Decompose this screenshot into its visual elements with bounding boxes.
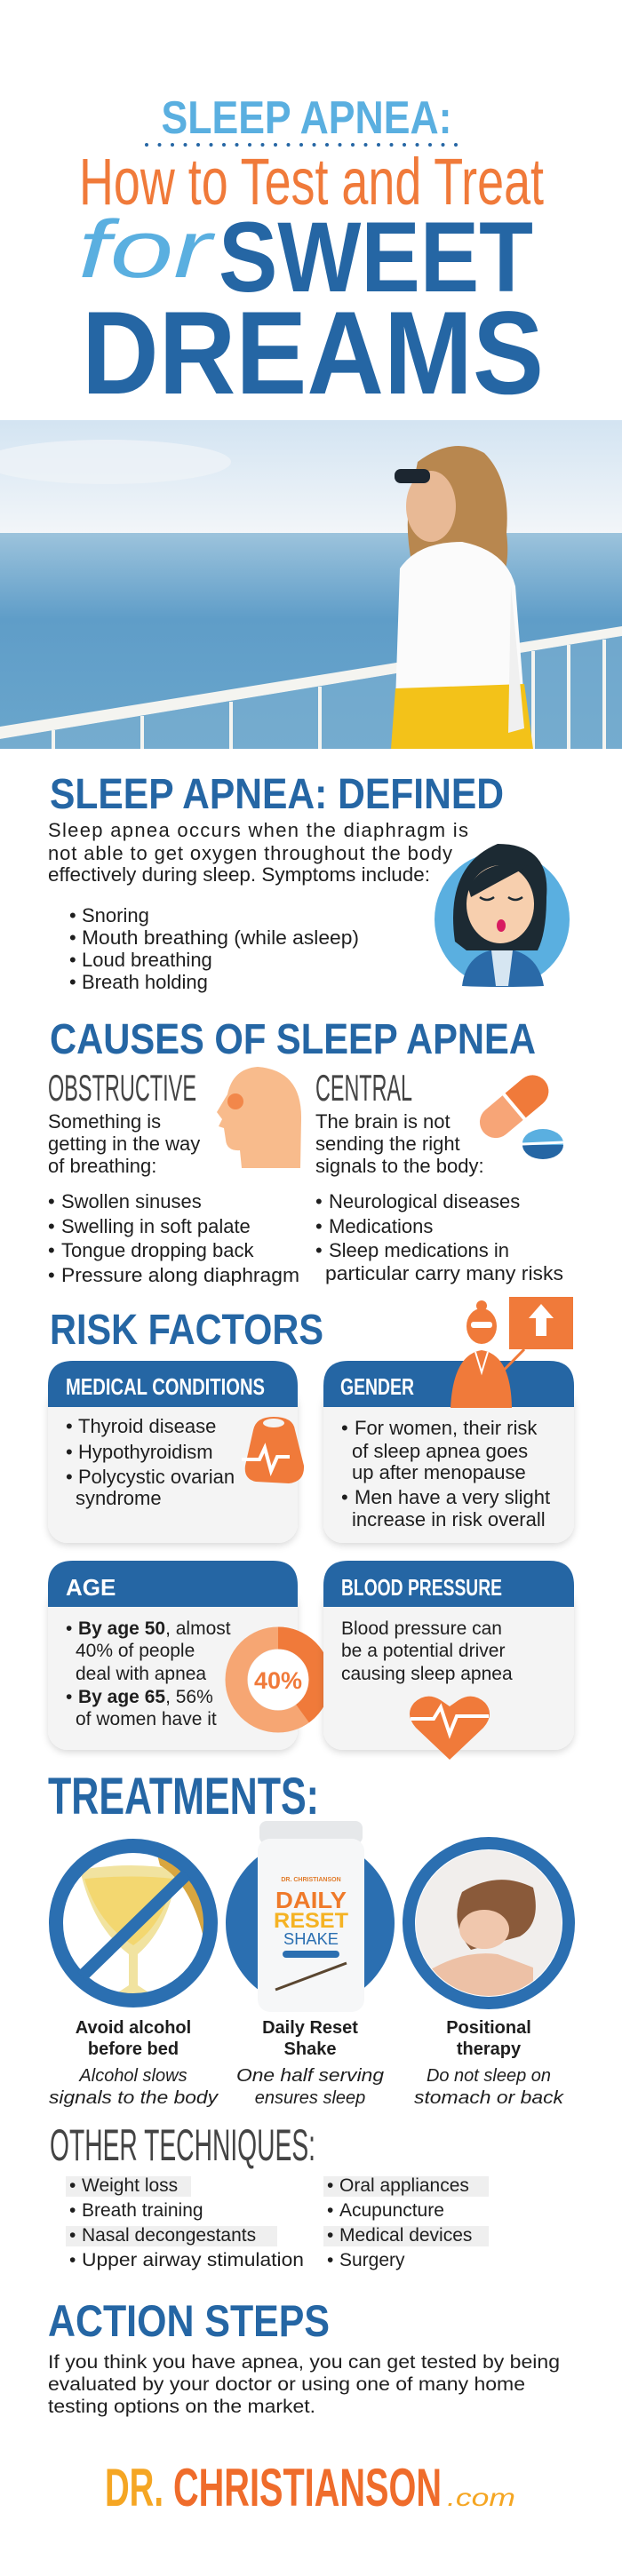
panel: obstructive: Pressure along diaphragm	[61, 1264, 299, 1286]
panel: obstructive: •	[48, 1239, 55, 1261]
text block: definition: not able to get oxygen throughout the body	[48, 842, 452, 864]
card: medical conditions: •	[66, 1441, 73, 1463]
icon: head profile	[217, 1067, 301, 1168]
panel: central: •	[315, 1190, 323, 1212]
list: other techniques: •	[327, 2225, 333, 2246]
panel: central: CENTRAL	[315, 1067, 412, 1109]
list: other techniques: •	[327, 2175, 333, 2196]
treatment: daily reset shake: DR. CHRISTIANSON	[281, 1877, 341, 1883]
text block: definition: effectively during sleep. Symptoms include:	[48, 863, 430, 886]
text block: definition: •	[69, 971, 76, 993]
title	[78, 92, 544, 419]
text block: action steps: If you think you have apnea, you can get tested by being	[48, 2352, 560, 2373]
icon: pills	[472, 1068, 563, 1159]
text block: definition: Loud breathing	[82, 949, 212, 971]
card: age: deal with apnea	[76, 1664, 206, 1684]
list: other techniques: Upper airway stimulation	[82, 2250, 304, 2270]
list: other techniques: •	[69, 2250, 76, 2270]
panel: obstructive	[48, 1067, 299, 1286]
text block: action steps	[48, 2352, 560, 2417]
heading: causes: CAUSES OF SLEEP APNEA	[50, 1016, 536, 1063]
icon: thyroid	[242, 1417, 304, 1483]
icon: teacher with up arrow board	[451, 1297, 573, 1408]
treatment: daily reset shake: ensures sleep	[255, 2088, 365, 2108]
card: gender: GENDER	[340, 1373, 414, 1400]
text block: definition: •	[69, 949, 76, 971]
treatment: daily reset shake: Shake	[284, 2039, 336, 2059]
logo: .com	[447, 2484, 515, 2511]
card: medical conditions: •	[66, 1415, 73, 1437]
treatment: avoid alcohol: Avoid alcohol	[76, 2018, 191, 2038]
card: gender: •	[341, 1417, 348, 1439]
treatment: daily reset shake: SHAKE	[283, 1930, 339, 1948]
card: medical conditions	[48, 1361, 304, 1543]
text block: definition: Breath holding	[82, 971, 208, 993]
card: age: By age 50, almost	[78, 1618, 231, 1639]
list: other techniques: Surgery	[339, 2250, 405, 2270]
title: SLEEP APNEA:	[162, 92, 451, 144]
panel: central: The brain is not	[315, 1110, 451, 1133]
panel: central: sending the right	[315, 1133, 460, 1155]
card: medical conditions: syndrome	[76, 1487, 162, 1509]
text block: action steps: testing options on the market.	[48, 2397, 315, 2417]
card: medical conditions: Hypothyroidism	[78, 1441, 213, 1463]
card: gender: For women, their risk	[355, 1417, 538, 1439]
card: blood pressure	[323, 1561, 574, 1760]
panel: central: signals to the body:	[315, 1155, 484, 1177]
chart: 40% donut	[236, 1638, 320, 1721]
panel: obstructive: Swelling in soft palate	[61, 1215, 251, 1237]
treatment: daily reset shake: One half serving	[236, 2066, 384, 2086]
panel: obstructive: getting in the way	[48, 1133, 200, 1155]
list: other techniques	[66, 2175, 489, 2270]
panel: central: Sleep medications in	[329, 1239, 509, 1261]
panel: central: particular carry many risks	[325, 1262, 563, 1284]
list: other techniques: •	[69, 2175, 76, 2196]
card: blood pressure: be a potential driver	[341, 1641, 505, 1661]
panel: obstructive: •	[48, 1190, 55, 1212]
panel: obstructive: •	[48, 1215, 55, 1237]
list: other techniques: •	[69, 2225, 76, 2246]
card: blood pressure: BLOOD PRESSURE	[341, 1574, 502, 1601]
treatment: avoid alcohol	[49, 1839, 219, 2108]
list: other techniques: •	[69, 2200, 76, 2221]
card: age	[48, 1561, 298, 1750]
card: age: of women have it	[76, 1709, 217, 1729]
text block: definition: •	[69, 926, 76, 949]
heading: treatments: TREATMENTS:	[48, 1768, 319, 1825]
list: other techniques: Medical devices	[339, 2225, 472, 2246]
treatment: daily reset shake	[226, 1821, 395, 2108]
list: other techniques: Acupuncture	[339, 2200, 444, 2221]
text block: definition: Snoring	[82, 904, 149, 926]
text block: definition: •	[69, 904, 76, 926]
card: gender: Men have a very slight	[355, 1486, 550, 1508]
chart: 40% donut: 40%	[254, 1667, 302, 1694]
list: other techniques: •	[327, 2200, 333, 2221]
treatment: positional therapy: Do not sleep on	[427, 2066, 551, 2086]
title: DREAMS	[82, 288, 544, 419]
treatment: avoid alcohol: signals to the body	[49, 2088, 219, 2108]
card: age: 40% of people	[76, 1641, 195, 1661]
card: gender: •	[341, 1486, 348, 1508]
treatment: avoid alcohol: before bed	[88, 2039, 179, 2059]
treatment: positional therapy: therapy	[457, 2039, 522, 2059]
treatment: positional therapy: stomach or back	[414, 2088, 564, 2108]
treatment: daily reset shake: RESET	[274, 1909, 348, 1933]
panel: obstructive: Swollen sinuses	[61, 1190, 202, 1212]
card: medical conditions: Polycystic ovarian	[78, 1466, 235, 1488]
panel: central	[315, 1067, 563, 1284]
list: other techniques: Weight loss	[82, 2175, 178, 2196]
panel: central: •	[315, 1215, 323, 1237]
panel: central: Neurological diseases	[329, 1190, 520, 1212]
panel: obstructive: Something is	[48, 1110, 161, 1133]
logo: DR.	[105, 2458, 163, 2517]
list: other techniques: Nasal decongestants	[82, 2225, 256, 2246]
treatment: daily reset shake: Daily Reset	[262, 2018, 358, 2038]
text block: definition: Sleep apnea occurs when the diaphragm is	[48, 819, 468, 841]
heading: action steps: ACTION STEPS	[48, 2296, 330, 2346]
panel: central: Medications	[329, 1215, 433, 1237]
panel: obstructive: •	[48, 1264, 55, 1286]
icon: heart with pulse	[410, 1697, 490, 1760]
treatment: avoid alcohol: Alcohol slows	[78, 2066, 187, 2086]
text block: definition: Mouth breathing (while asleep)	[82, 926, 359, 949]
card: age: •	[66, 1687, 72, 1707]
card: age: By age 65, 56%	[78, 1687, 213, 1707]
list: other techniques: Breath training	[82, 2200, 203, 2221]
card: medical conditions: MEDICAL CONDITIONS	[66, 1373, 265, 1400]
panel: obstructive: of breathing:	[48, 1155, 156, 1177]
photo: woman at seaside balcony	[0, 420, 622, 749]
card: medical conditions: •	[66, 1466, 73, 1488]
treatment: positional therapy	[409, 1843, 569, 2108]
card: gender: increase in risk overall	[352, 1508, 546, 1530]
title: SWEET	[219, 202, 533, 313]
title: for	[78, 204, 216, 295]
card: blood pressure: Blood pressure can	[341, 1618, 502, 1639]
card: blood pressure: causing sleep apnea	[341, 1664, 513, 1684]
card: gender	[323, 1361, 574, 1543]
icon: sleeping woman	[435, 844, 570, 987]
card: age: •	[66, 1618, 72, 1639]
text block: definition	[48, 819, 468, 993]
logo: CHRISTIANSON	[173, 2458, 442, 2517]
card: gender: up after menopause	[352, 1461, 526, 1483]
panel: obstructive: Tongue dropping back	[61, 1239, 254, 1261]
list: other techniques: •	[327, 2250, 333, 2270]
heading: other techniques: OTHER TECHNIQUES:	[50, 2120, 315, 2170]
text block: action steps: evaluated by your doctor or using one of many home	[48, 2374, 525, 2395]
card: medical conditions: Thyroid disease	[78, 1415, 216, 1437]
card: gender: of sleep apnea goes	[352, 1440, 528, 1462]
panel: obstructive: OBSTRUCTIVE	[48, 1067, 196, 1109]
heading: risk factors: RISK FACTORS	[50, 1307, 323, 1354]
heading: sleep apnea defined: SLEEP APNEA: DEFINED	[50, 771, 504, 818]
treatment: positional therapy: Positional	[446, 2018, 531, 2038]
list: other techniques: Oral appliances	[339, 2175, 469, 2196]
treatment: daily reset shake: DAILY	[275, 1887, 347, 1913]
panel: central: •	[315, 1239, 323, 1261]
card: age: AGE	[66, 1574, 116, 1601]
